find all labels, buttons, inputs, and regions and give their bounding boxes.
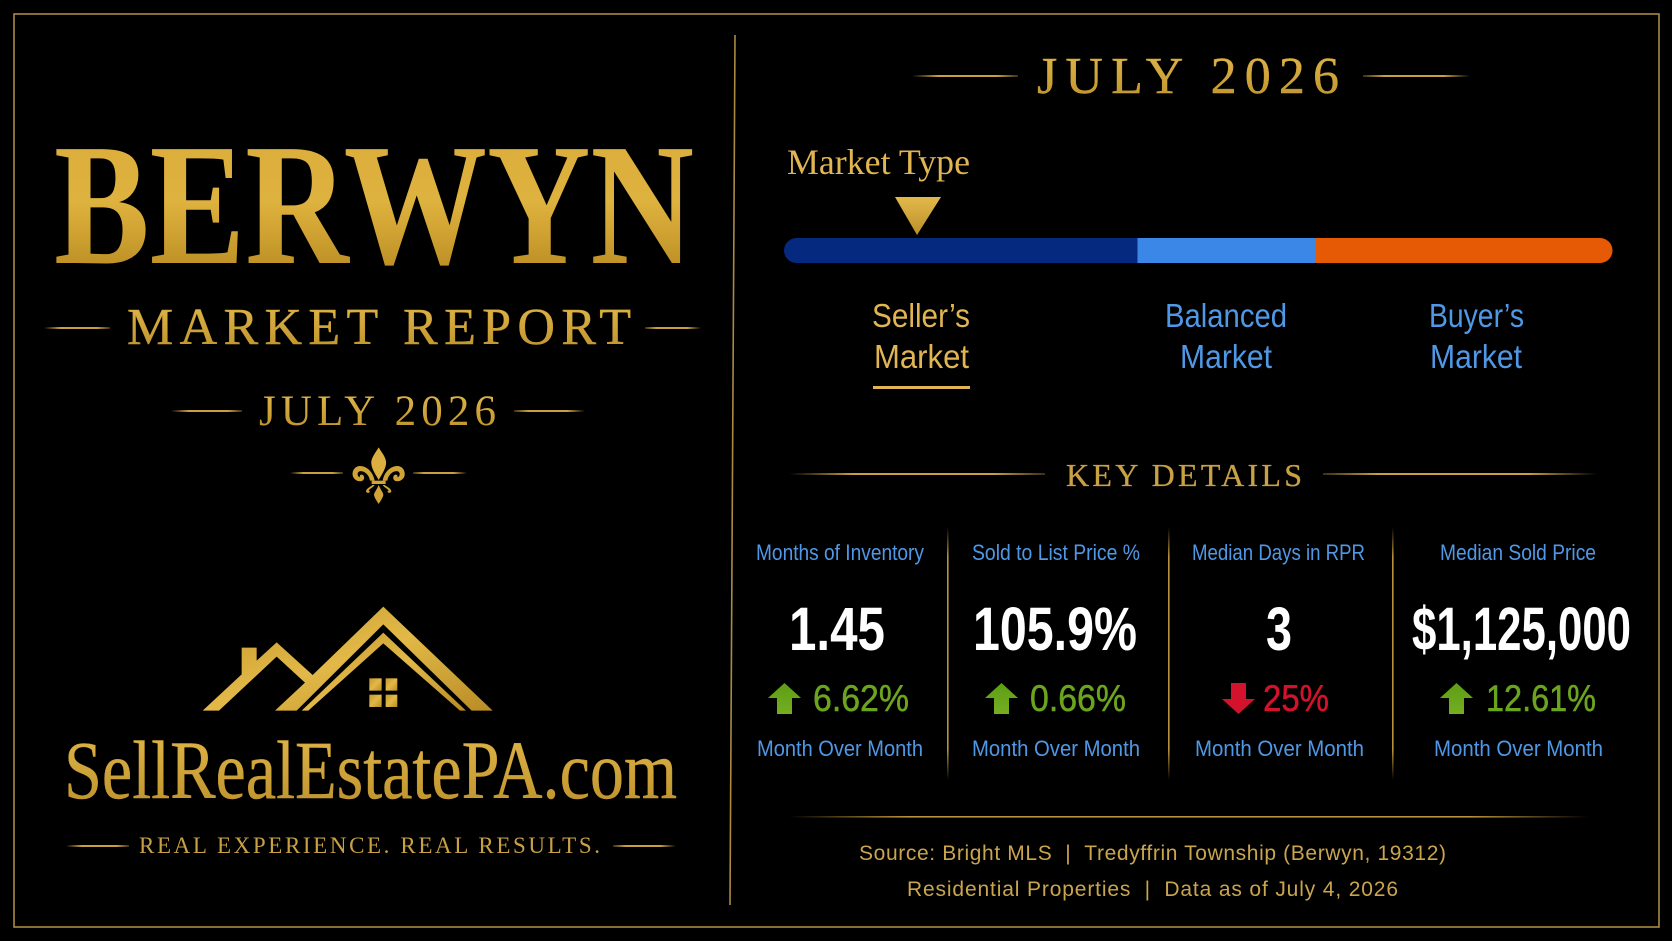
panel: median days in RPR: 25% [1263, 678, 1329, 719]
icon: up arrow [1440, 683, 1473, 714]
option: seller's market: Seller’s [872, 297, 970, 334]
panel: sold to list price: Sold to List Price % [972, 540, 1140, 565]
option: balanced market [1165, 297, 1287, 375]
source note [859, 842, 1446, 901]
panel: market type scale [784, 142, 1612, 389]
panel: months of inventory: Months of Inventory [756, 540, 924, 565]
icon: fleur-de-lis [290, 447, 467, 504]
panel: sold to list price: Month Over Month [972, 736, 1140, 761]
icon: up arrow [768, 683, 801, 714]
panel: months of inventory [756, 540, 924, 761]
panel: median sold price [1412, 540, 1631, 761]
panel: months of inventory: 6.62% [813, 678, 909, 719]
panel: median sold price: 12.61% [1486, 678, 1596, 719]
panel: branding [44, 108, 701, 858]
vertical panel divider [730, 35, 735, 905]
panel: months of inventory: Month Over Month [757, 736, 923, 761]
panel: median days in RPR: Month Over Month [1195, 736, 1364, 761]
source note: Source: Bright MLS | Tredyffrin Township (Berwyn, 19312) [859, 842, 1446, 865]
panel: sold to list price [972, 540, 1140, 761]
option: seller's market: Market [874, 338, 969, 375]
option: buyer's market: Market [1430, 338, 1522, 375]
panel: sold to list price: 0.66% [1030, 678, 1126, 719]
heading: key details: KEY DETAILS [1066, 457, 1302, 493]
option: seller's market [872, 297, 970, 389]
stat dividers [947, 527, 1394, 780]
panel: median days in RPR [1192, 540, 1365, 761]
panel: median sold price: Month Over Month [1434, 736, 1603, 761]
heading: market report: MARKET REPORT [127, 299, 631, 356]
panel: months of inventory: 1.45 [789, 595, 885, 663]
option: balanced market: Balanced [1165, 297, 1287, 334]
icon: pointer triangle [895, 197, 941, 235]
panel: median days in RPR: 3 [1266, 595, 1292, 663]
panel: median sold price: Median Sold Price [1440, 540, 1596, 565]
label: market type: Market Type [787, 142, 970, 182]
source note: Residential Properties | Data as of July 4, 2026 [907, 878, 1398, 901]
heading: right date: JULY 2026 [1037, 48, 1339, 105]
icon: house roofline logo [203, 607, 493, 711]
title: Berwyn: BERWYN [54, 108, 694, 301]
brand website: SellRealEstatePA.com [64, 724, 677, 816]
icon: down arrow [1222, 683, 1255, 714]
tagline: REAL EXPERIENCE. REAL RESULTS. [139, 833, 600, 858]
panel: median days in RPR: Median Days in RPR [1192, 540, 1365, 565]
option: buyer's market: Buyer’s [1429, 297, 1524, 334]
panel: sold to list price: 105.9% [973, 595, 1137, 663]
footer rule [789, 816, 1589, 818]
icon: up arrow [985, 683, 1018, 714]
option: buyer's market [1429, 297, 1524, 375]
market scale bar [784, 238, 1612, 263]
date: July 2026: JULY 2026 [259, 388, 496, 435]
option: balanced market: Market [1180, 338, 1272, 375]
